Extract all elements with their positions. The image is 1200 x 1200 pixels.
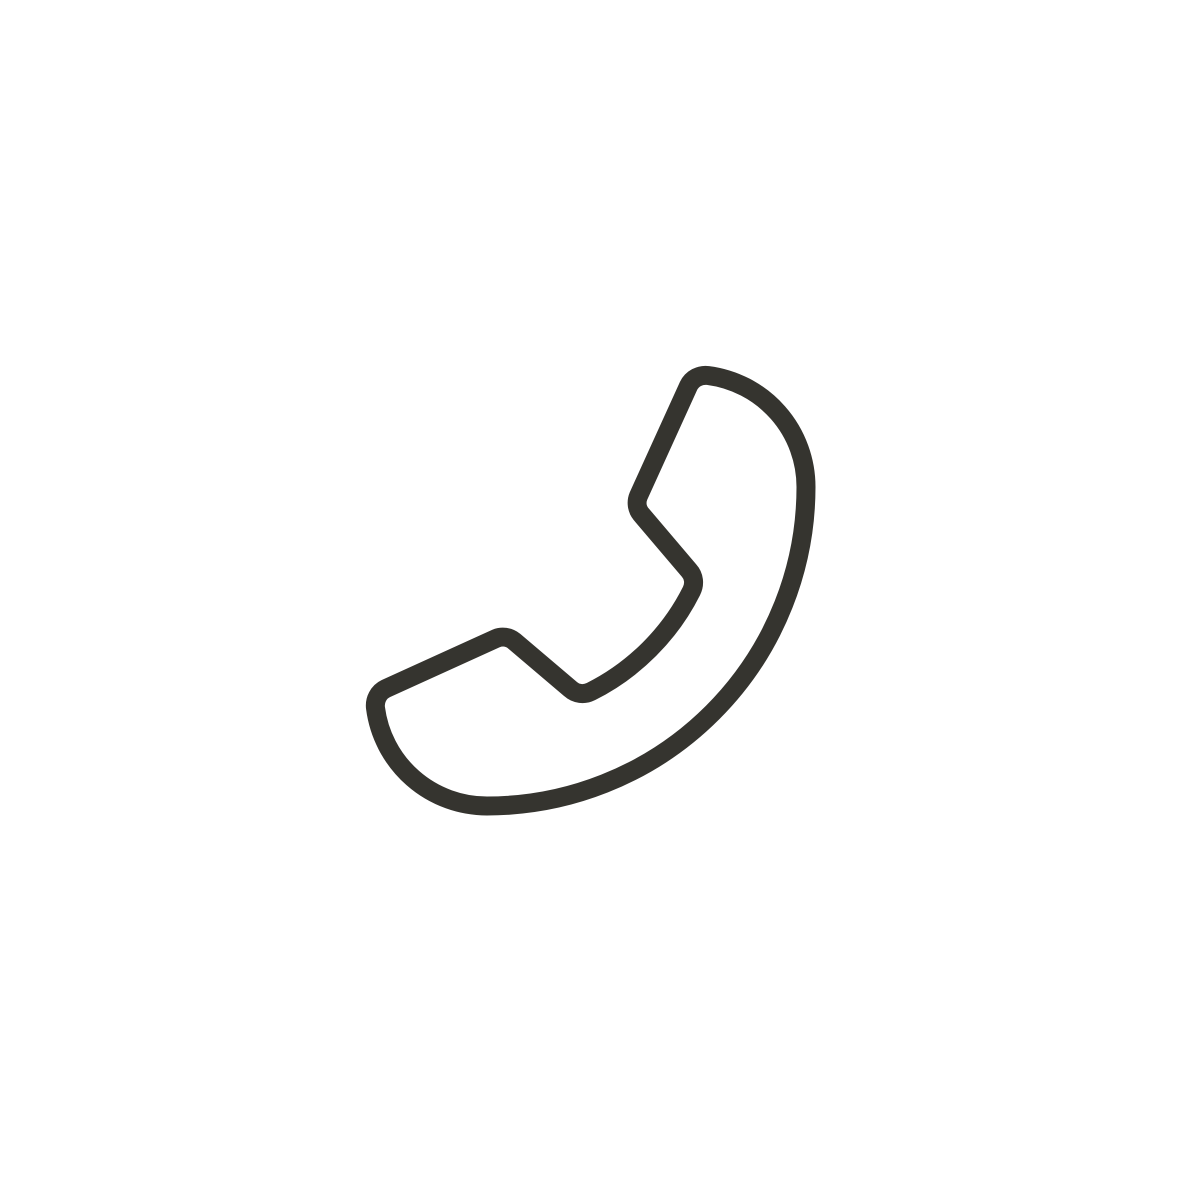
icon: phone handset [375, 375, 806, 806]
